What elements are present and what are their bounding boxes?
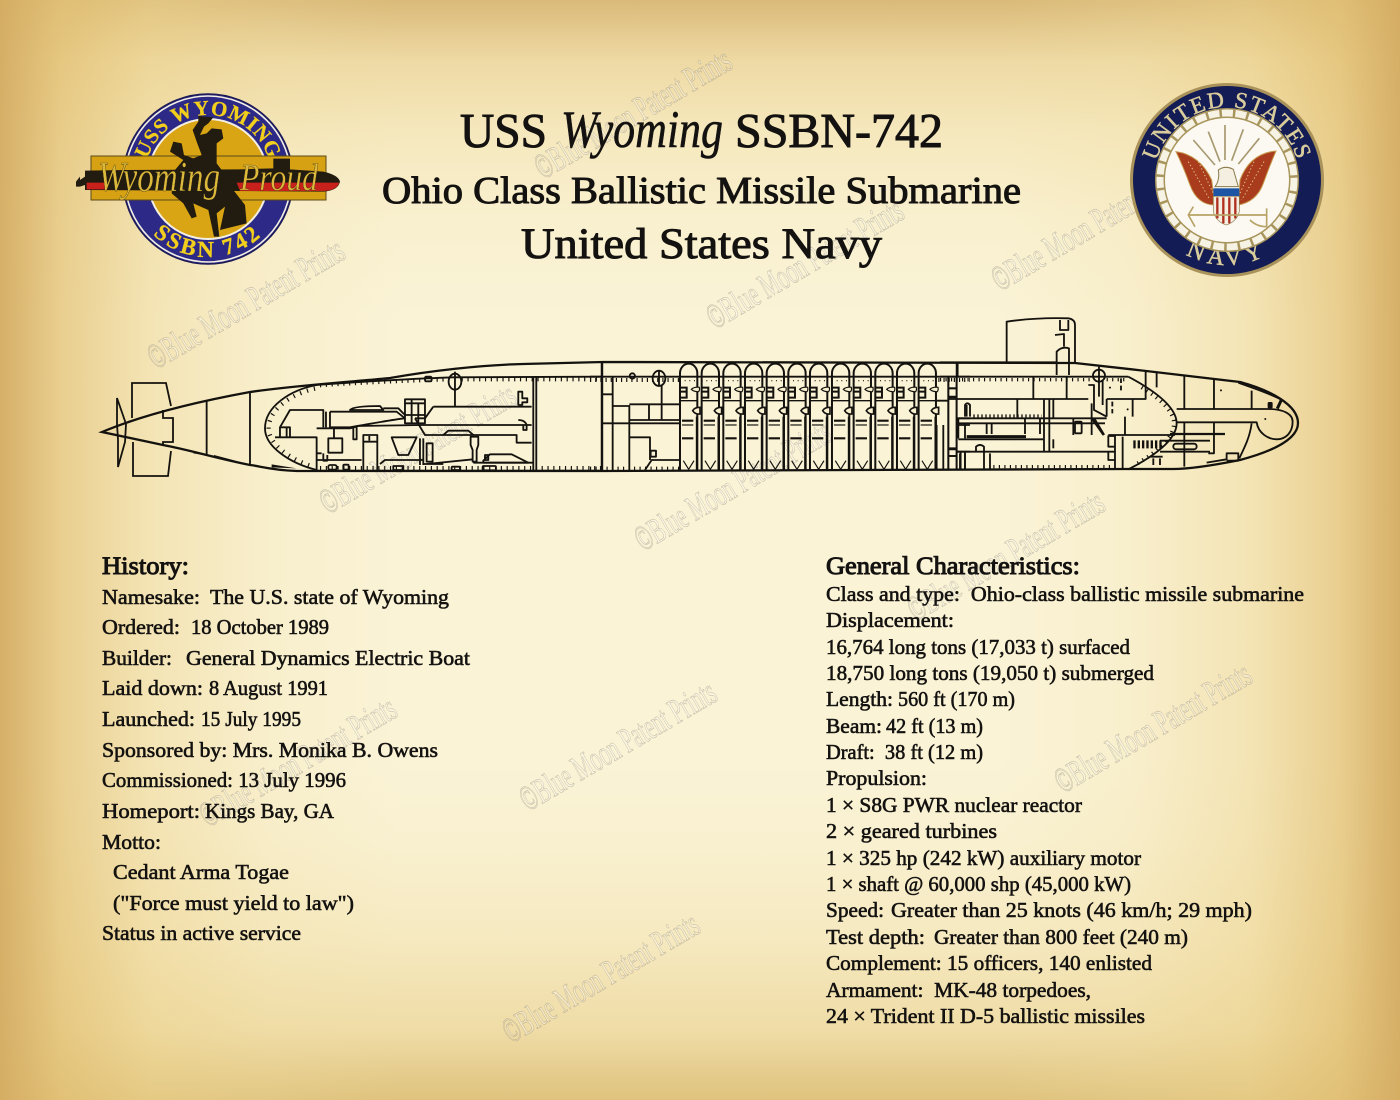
- characteristics list: 560 ft (170 m): [898, 687, 1015, 711]
- watermarks: ©Blue Moon Patent Prints: [900, 482, 1111, 629]
- history list: Builder:: [102, 646, 172, 670]
- characteristics list: 1 × 325 hp (242 kW) auxiliary motor: [826, 846, 1141, 870]
- characteristics list: Armament: MK-48 torpedoes,: [826, 978, 1091, 1002]
- history list: [102, 585, 470, 945]
- bow compartments: [1177, 376, 1293, 439]
- hull outline: [102, 362, 1298, 471]
- history list: Status in active service: [102, 921, 301, 945]
- emblem: USS Wyoming: SSBN 742: [154, 225, 260, 258]
- missile tubes: [680, 364, 939, 470]
- history list: Kings Bay, GA: [205, 799, 334, 823]
- history list: Ordered:: [102, 615, 180, 639]
- stern planes and propeller: [117, 383, 173, 476]
- midsection detail: [590, 362, 970, 471]
- characteristics list: Class and type: Ohio-class ballistic missile submarine: [826, 582, 1304, 606]
- emblem: United States Navy: UNITED STATES: [1142, 92, 1311, 158]
- history list: Cedant Arma Togae: [113, 860, 289, 884]
- submarine cutaway: [102, 318, 1298, 476]
- characteristics list: 42 ft (13 m): [886, 714, 983, 738]
- history list: Launched:: [102, 707, 195, 731]
- characteristics list: 24 × Trident II D-5 ballistic missiles: [826, 1004, 1145, 1028]
- emblem: USS Wyoming: Wyoming: [98, 155, 220, 201]
- forward pressure hull dome: [1128, 377, 1177, 469]
- watermarks: ©Blue Moon Patent Prints: [192, 688, 403, 835]
- characteristics list: Greater than 800 feet (240 m): [934, 925, 1188, 949]
- watermarks: ©Blue Moon Patent Prints: [984, 152, 1195, 299]
- characteristics list: 18,750 long tons (19,050 t) submerged: [826, 661, 1154, 685]
- history list: ("Force must yield to law"): [113, 891, 354, 915]
- characteristics list: Length:: [826, 687, 893, 711]
- history list: Sponsored by: Mrs. Monika B. Owens: [102, 738, 438, 762]
- watermarks: ©Blue Moon Patent Prints: [512, 672, 723, 819]
- history list: General Dynamics Electric Boat: [186, 646, 470, 670]
- characteristics list: Beam:: [826, 714, 882, 738]
- history list: The U.S. state of Wyoming: [210, 585, 449, 609]
- history list: Namesake:: [102, 585, 200, 609]
- watermarks: ©Blue Moon Patent Prints: [495, 904, 706, 1051]
- title: USS: [460, 103, 547, 158]
- history list: 8 August 1991: [209, 676, 328, 700]
- characteristics list: 16,764 long tons (17,033 t) surfaced: [826, 635, 1130, 659]
- title: Wyoming: [561, 101, 723, 159]
- history heading: History:: [102, 553, 189, 580]
- emblem: USS Wyoming: USS WYOMING: [134, 100, 280, 156]
- watermarks: ©Blue Moon Patent Prints: [699, 190, 910, 337]
- emblem: United States Navy: NAVY: [1186, 243, 1260, 266]
- characteristics list: 2 × geared turbines: [826, 819, 997, 843]
- characteristics list: 1 × shaft @ 60,000 shp (45,000 kW): [826, 872, 1131, 896]
- history list: 18 October 1989: [191, 615, 329, 639]
- characteristics list: Complement: 15 officers, 140 enlisted: [826, 951, 1152, 975]
- emblem: United States Navy: [1130, 83, 1324, 277]
- history list: Laid down:: [102, 676, 203, 700]
- forward section detail: [940, 318, 1293, 469]
- characteristics list: 1 × S8G PWR nuclear reactor: [826, 793, 1082, 817]
- watermarks: ©Blue Moon Patent Prints: [627, 412, 838, 559]
- watermarks: ©Blue Moon Patent Prints: [312, 375, 523, 522]
- watermarks: ©Blue Moon Patent Prints: [140, 230, 351, 377]
- characteristics heading: General Characteristics:: [826, 553, 1080, 580]
- emblem: USS Wyoming: [76, 93, 340, 265]
- characteristics list: Displacement:: [826, 608, 954, 632]
- title: [460, 101, 943, 159]
- emblem: USS Wyoming: Proud: [239, 157, 319, 199]
- history list: Commissioned: 13 July 1996: [102, 768, 346, 792]
- characteristics list: Greater than 25 knots (46 km/h; 29 mph): [891, 898, 1252, 922]
- characteristics list: Speed:: [826, 898, 884, 922]
- subtitle: navy: United States Navy: [521, 221, 883, 268]
- characteristics list: [826, 582, 1304, 1028]
- characteristics list: Draft: 38 ft (12 m): [826, 740, 983, 764]
- watermarks: ©Blue Moon Patent Prints: [1047, 654, 1258, 801]
- subtitle: Ohio Class Ballistic Missile Submarine: [382, 170, 1021, 212]
- characteristics list: Test depth:: [826, 925, 925, 949]
- history list: Homeport:: [102, 799, 200, 823]
- watermarks: [140, 40, 1258, 1051]
- title: SSBN-742: [735, 103, 943, 158]
- aft section detail: [193, 362, 603, 471]
- history list: 15 July 1995: [201, 707, 301, 731]
- history list: Motto:: [102, 830, 161, 854]
- characteristics list: Propulsion:: [826, 766, 927, 790]
